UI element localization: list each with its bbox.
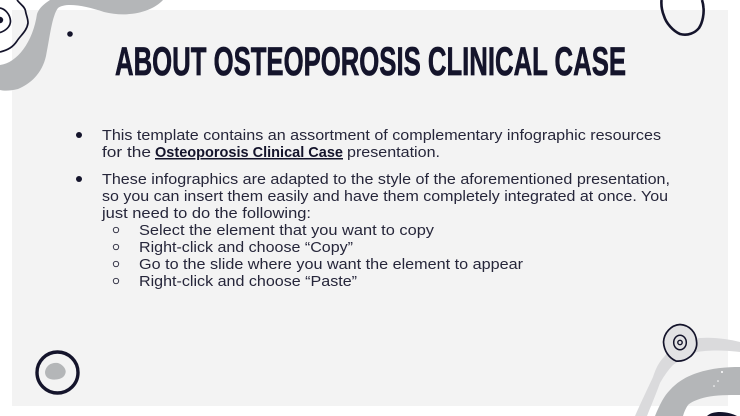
text: first bullet: presentation. [347, 144, 440, 161]
text: first bullet [102, 127, 661, 161]
decoration: top-left blob and rings [0, 0, 163, 91]
bullet list [76, 127, 670, 290]
decoration: bottom-left ring with blob [37, 352, 78, 393]
sub-list of steps: Right-click and choose “Paste” [139, 273, 357, 290]
decoration: target-shaped cell icon [664, 324, 697, 361]
decoration: small dot [67, 31, 73, 37]
bullet marker 1 [76, 132, 82, 138]
text: second bullet [101, 171, 670, 222]
sub-list of steps: Go to the slide where you want the element to appear [139, 256, 523, 273]
decoration: bottom-right arcs [635, 338, 740, 416]
text: second bullet: just need to do the following: [101, 205, 311, 222]
sub-list of steps: Right-click and choose “Copy” [139, 239, 353, 256]
text: first bullet: Osteoporosis Clinical Case [155, 144, 343, 161]
sub-list of steps: Select the element that you want to copy [139, 222, 435, 239]
text: second bullet: These infographics are adapted to the style of the aforementioned presentation, [102, 171, 670, 188]
decoration: top-right ring [661, 0, 704, 35]
sub-list of steps [113, 222, 523, 290]
text: second bullet: so you can insert them easily and have them completely integrated at once. You [102, 188, 668, 205]
text: first bullet: for the [102, 144, 151, 161]
bullet marker 2 [76, 176, 82, 182]
text: first bullet: This template contains an assortment of complementary infographic resources [102, 127, 661, 144]
